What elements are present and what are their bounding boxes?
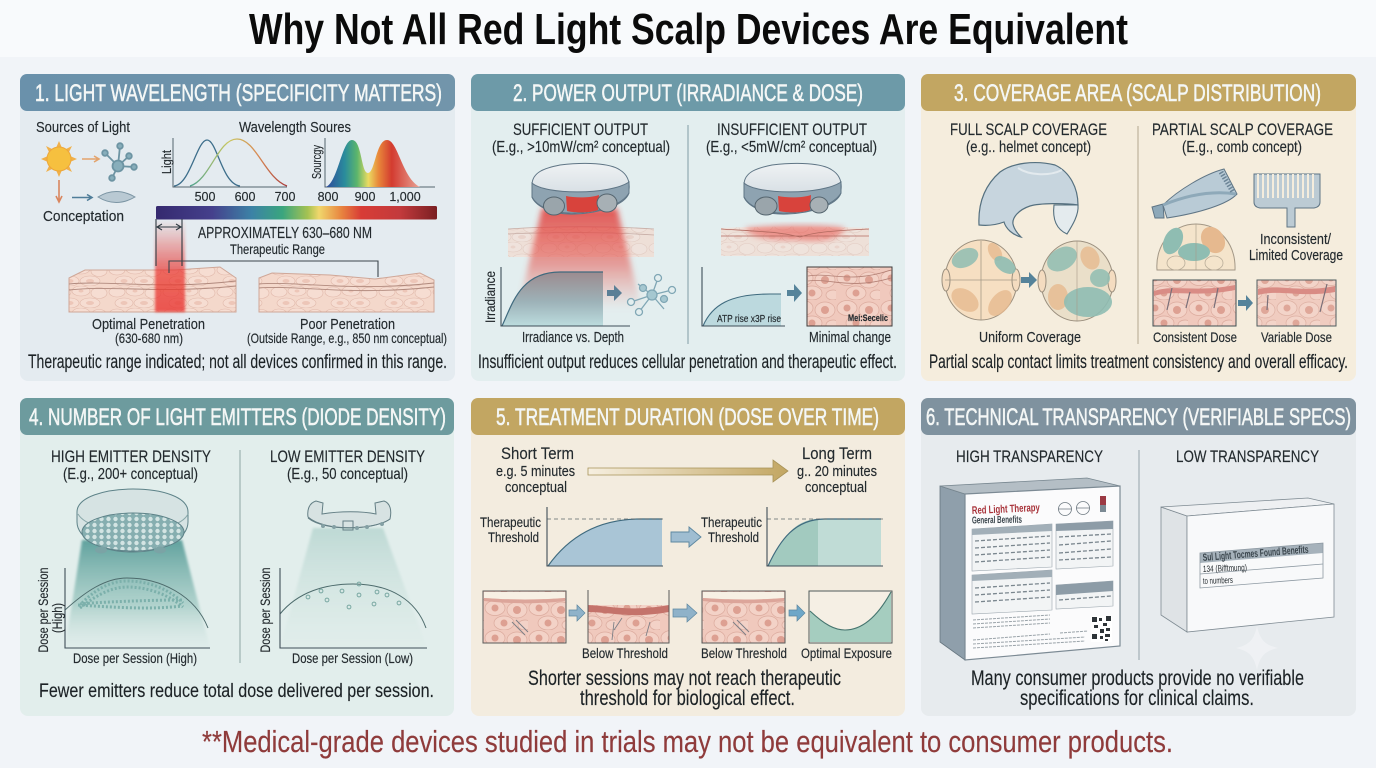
skin box: variable	[1257, 280, 1336, 326]
short term label: Short Term	[501, 444, 574, 463]
head: partial coverage	[1157, 222, 1235, 270]
high density detail: (E.g., 200+ conceptual)	[63, 466, 198, 483]
chart: source spectrum: 800	[318, 190, 338, 204]
label: consistent dose: Consistent Dose	[1153, 329, 1237, 345]
box title: Red Light Therapy	[972, 502, 1041, 517]
arrow	[1238, 295, 1253, 311]
icon: sun	[41, 141, 77, 177]
label: optimal range: (630-680 nm)	[115, 330, 183, 346]
label: threshold right 2: Threshold	[708, 529, 759, 545]
box label title: Sul Light Tocmes Found Benefits	[1202, 544, 1309, 564]
divider	[239, 450, 241, 663]
chart: long threshold	[767, 507, 883, 566]
chart: dose high: (High)	[49, 603, 65, 633]
arrow	[1021, 272, 1037, 288]
arrow	[671, 527, 701, 547]
label: outside range: (Outside Range, e.g., 850 nm conceptual)	[247, 330, 447, 346]
chart: ATP rise: ATP rise x3P rise	[717, 313, 781, 325]
label: approx range: APPROXIMATELY 630–680 NM	[198, 225, 372, 242]
panel: 5 treatment duration	[471, 398, 905, 716]
label: conceptation: Conceptation	[43, 208, 124, 225]
box: blank packaging	[1161, 498, 1334, 632]
skin layer sufficient	[508, 227, 654, 257]
low density heading: LOW EMITTER DENSITY	[270, 447, 425, 466]
label: threshold right: Therapeutic	[701, 514, 762, 530]
teal light cone high	[65, 540, 210, 648]
cell image: minimal change: Mei:Secelic	[848, 313, 888, 324]
panel: 2 power output	[471, 74, 905, 381]
full coverage heading: FULL SCALP COVERAGE	[950, 120, 1107, 139]
label: sources of light: Sources of Light	[36, 119, 131, 136]
caption 6 line 2: specifications for clinical claims.	[1020, 687, 1254, 710]
cell image: minimal change	[807, 267, 892, 326]
spectrum bar	[156, 206, 437, 220]
head: uniform left	[942, 240, 1020, 320]
insufficient heading: INSUFFICIENT OUTPUT	[717, 120, 867, 139]
divider	[1138, 450, 1140, 660]
arrow	[607, 285, 622, 301]
heading 4: 4. NUMBER OF LIGHT EMITTERS (DIODE DENSITY)	[29, 404, 446, 431]
label: optimal exposure: Optimal Exposure	[801, 645, 892, 661]
skin: optimal penetration	[69, 267, 236, 312]
chart: dose high	[35, 568, 210, 652]
head: uniform right	[1038, 241, 1116, 321]
arrow	[787, 284, 802, 302]
box subtitle: General Benefits	[972, 515, 1022, 526]
skin box: consistent	[1153, 280, 1236, 326]
badges	[1058, 496, 1106, 516]
icon: helmet	[979, 163, 1078, 237]
arrow: sun to molecule	[82, 156, 99, 162]
arrow: to lens	[72, 194, 92, 200]
sufficient heading: SUFFICIENT OUTPUT	[513, 120, 648, 139]
chart: source spectrum: 900	[355, 190, 375, 204]
arrow	[789, 605, 805, 621]
chart: dose low: Dose per Session	[257, 568, 273, 652]
panel: 3 coverage area	[921, 74, 1356, 381]
sparkle	[1236, 626, 1278, 670]
label: inconsistent coverage: Inconsistent/	[1260, 231, 1332, 248]
sufficient detail: (E.g., >10mW/cm² conceptual)	[492, 139, 670, 156]
high density heading: HIGH EMITTER DENSITY	[51, 447, 211, 466]
footnote: **Medical-grade devices studied in trials may not be equivalent to consumer products.	[202, 724, 1173, 759]
caption 5 line 1: Shorter sessions may not reach therapeutic	[528, 667, 841, 690]
arrow: short to long term	[588, 460, 788, 482]
label: variable dose: Variable Dose	[1261, 329, 1332, 345]
chart: dose high: Dose per Session	[35, 568, 51, 652]
long term duration: g.. 20 minutes	[797, 463, 877, 480]
high transparency heading: HIGH TRANSPARENCY	[956, 447, 1103, 466]
icon: comb	[1254, 174, 1320, 227]
red light beam	[155, 220, 185, 312]
device: low density	[308, 501, 391, 530]
panel: 4 light emitters	[20, 398, 454, 716]
arrow	[569, 605, 585, 621]
caption 5 line 2: threshold for biological effect.	[580, 687, 795, 710]
long term conceptual: conceptual	[805, 479, 867, 496]
icon: molecule	[102, 143, 137, 181]
arrow: sun to conceptation	[56, 180, 62, 202]
label: therapeutic range: Therapeutic Range	[230, 241, 325, 257]
chart: irradiance vs depth: Irradiance	[482, 271, 498, 323]
label: minimal change: Minimal change	[809, 329, 891, 346]
teal light cone low	[280, 528, 427, 648]
chart: short threshold	[547, 507, 663, 566]
label: below threshold: Below Threshold	[582, 645, 668, 661]
panel: 1 light wavelength	[20, 74, 455, 381]
label: poor penetration: Poor Penetration	[300, 316, 395, 333]
low transparency heading: LOW TRANSPARENCY	[1176, 447, 1319, 466]
box: detailed specifications	[940, 478, 1120, 660]
insufficient detail: (E.g., <5mW/cm² conceptual)	[706, 139, 877, 156]
label: dose low: Dose per Session (Low)	[292, 650, 413, 666]
chart: source spectrum: 1,000	[389, 190, 421, 204]
QR code	[1091, 616, 1112, 642]
chart: light curves: 600	[235, 190, 255, 204]
short term duration: e.g. 5 minutes	[496, 463, 575, 480]
label: dose high: Dose per Session (High)	[73, 650, 197, 666]
caption 1: Therapeutic range indicated; not all devices confirmed in this range.	[28, 352, 447, 373]
skin: poor penetration	[259, 273, 434, 312]
label: threshold left: Therapeutic	[480, 514, 541, 530]
chart: light curves: 700	[275, 190, 295, 204]
label: irradiance vs depth: Irradiance vs. Depth	[522, 329, 624, 346]
label: optimal penetration: Optimal Penetration	[92, 316, 205, 333]
skin layer insufficient	[721, 225, 869, 256]
partial coverage detail: (E.g., comb concept)	[1182, 139, 1302, 156]
device: insufficient	[744, 163, 841, 215]
chart: irradiance vs depth	[482, 267, 630, 326]
chart: source spectrum: Sourcgy	[310, 144, 324, 179]
box label row 2: to numbers	[1203, 575, 1233, 586]
skin box 3	[702, 591, 785, 643]
chart: light curves	[160, 138, 295, 204]
device: sufficient	[532, 163, 629, 215]
label: below threshold: Below Threshold	[701, 645, 787, 661]
divider	[687, 125, 689, 344]
bracket	[169, 261, 378, 277]
long term label: Long Term	[802, 444, 872, 463]
divider	[1137, 126, 1139, 344]
caption 2: Insufficient output reduces cellular penetration and therapeutic effect.	[478, 352, 897, 373]
title: Why Not All Red Light Scalp Devices Are Equivalent	[249, 5, 1128, 54]
panel: 6 technical transparency	[921, 398, 1356, 716]
low density detail: (E.g., 50 conceptual)	[287, 466, 408, 483]
icon: molecule outline	[628, 274, 676, 316]
heading 5: 5. TREATMENT DURATION (DOSE OVER TIME)	[496, 404, 879, 431]
chart: dose low	[257, 568, 427, 652]
chart: light curves: 500	[195, 190, 215, 204]
label: limited coverage: Limited Coverage	[1249, 247, 1343, 264]
heading 2: 2. POWER OUTPUT (IRRADIANCE & DOSE)	[513, 80, 863, 107]
chart: source spectrum	[310, 138, 435, 204]
heading 1: 1. LIGHT WAVELENGTH (SPECIFICITY MATTERS)	[35, 80, 442, 107]
chart: optimal exposure	[809, 591, 892, 643]
icon: comb device	[1152, 169, 1237, 218]
spec tables	[972, 521, 1113, 648]
range marker	[156, 219, 182, 266]
device: high density	[77, 489, 188, 554]
partial coverage heading: PARTIAL SCALP COVERAGE	[1152, 120, 1333, 139]
full coverage detail: (e.g.. helmet concept)	[966, 139, 1091, 156]
label: wavelength sources: Wavelength Soures	[239, 119, 351, 136]
arrow	[673, 604, 697, 622]
label: threshold left 2: Threshold	[488, 529, 539, 545]
red light cone	[518, 208, 642, 310]
title band	[0, 0, 1376, 57]
chart: ATP rise	[702, 267, 785, 326]
short term conceptual: conceptual	[505, 479, 567, 496]
icon: lens	[98, 192, 135, 202]
chart: light curves: Light	[160, 150, 174, 174]
label: uniform coverage: Uniform Coverage	[979, 329, 1081, 346]
skin box 1	[483, 591, 566, 643]
caption 4: Fewer emitters reduce total dose delivered per session.	[39, 681, 434, 702]
box label row 1: 134 (Bifftmung)	[1203, 562, 1247, 574]
skin box 2	[588, 590, 669, 643]
